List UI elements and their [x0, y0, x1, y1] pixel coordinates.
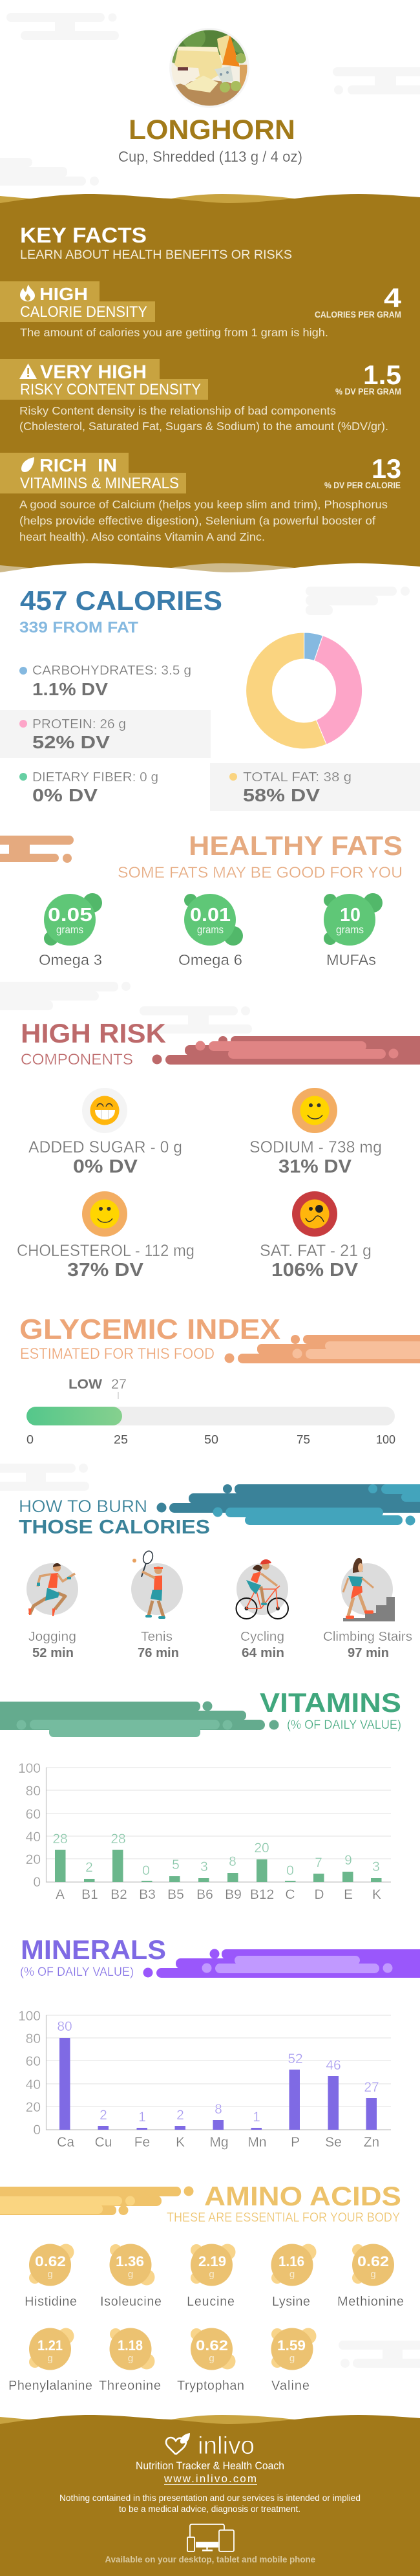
- legend: dietary fiber: DIETARY FIBER: 0 g: [32, 770, 158, 785]
- badge: omega 3: [39, 893, 102, 968]
- gauge label: [68, 1377, 127, 1399]
- badge: tryptophan: [177, 2328, 244, 2393]
- fact: risky content density: (Cholesterol, Saturated Fat, Sugars & Sodium) to the amount (%DV/gr).: [19, 420, 388, 433]
- gauge axis labels: 50: [204, 1433, 218, 1446]
- panel: calories: [0, 585, 420, 811]
- bar chart: vitamins: D: [314, 1887, 324, 1902]
- bar chart: minerals: 46: [326, 2058, 341, 2073]
- icon: warning triangle: [19, 363, 37, 379]
- disclaimer: [59, 2493, 361, 2514]
- bar chart: vitamins: 20: [26, 1852, 41, 1867]
- legend: dietary fiber: 0% DV: [32, 785, 98, 805]
- icon: stair climber: [341, 1558, 395, 1621]
- badge: threonine: g: [128, 2353, 133, 2364]
- badge: isoleucine: Isoleucine: [100, 2295, 162, 2309]
- badge: valine: 1.59: [277, 2337, 306, 2354]
- legend: total fat: [210, 763, 420, 811]
- subheading: (% OF DAILY VALUE): [287, 1718, 401, 1732]
- badge: methionine: 0.62: [357, 2253, 389, 2269]
- badge: omega 3: grams: [56, 924, 83, 936]
- item: saturated fat: SAT. FAT - 21 g: [260, 1242, 372, 1260]
- badge: valine: Valine: [271, 2379, 310, 2393]
- bar chart: vitamins: K: [372, 1887, 381, 1902]
- badge: lysine: [271, 2244, 317, 2309]
- badge: threonine: [99, 2328, 161, 2393]
- badge: mufas: grams: [336, 924, 364, 936]
- bar chart: vitamins: 28: [52, 1832, 68, 1846]
- badge: mufas: MUFAs: [326, 951, 376, 968]
- subheading: ESTIMATED FOR THIS FOOD: [20, 1345, 215, 1363]
- bar chart: vitamins: B12: [250, 1887, 274, 1902]
- bar chart: minerals: Zn: [364, 2135, 379, 2150]
- panel: how to burn those calories: [19, 1484, 420, 1660]
- badge: lysine: 1.16: [278, 2253, 304, 2269]
- subheading: SOME FATS MAY BE GOOD FOR YOU: [118, 864, 403, 882]
- activity: tennis: [131, 1550, 183, 1660]
- tagline: Nutrition Tracker & Health Coach: [136, 2460, 284, 2472]
- badge: leucine: [187, 2244, 235, 2309]
- activity: jogging: [26, 1563, 78, 1660]
- item: cholesterol: 37% DV: [67, 1260, 144, 1281]
- gauge axis labels: 0: [26, 1433, 34, 1446]
- bar chart: minerals: K: [176, 2135, 185, 2150]
- bar chart: vitamins: B5: [167, 1887, 184, 1902]
- heading: calories: 457 CALORIES: [20, 585, 222, 616]
- badge: phenylalanine: [8, 2328, 92, 2393]
- legend: total fat: 58% DV: [243, 785, 320, 805]
- item: saturated fat: 106% DV: [271, 1260, 359, 1281]
- badge: tryptophan: g: [209, 2353, 215, 2364]
- activity: tennis: Tenis: [141, 1630, 173, 1644]
- icon: devices: [187, 2524, 234, 2551]
- gauge label: 27: [111, 1377, 127, 1392]
- badge: omega 6: Omega 6: [178, 951, 242, 968]
- subheading: LEARN ABOUT HEALTH BENEFITS OR RISKS: [20, 248, 292, 262]
- bar chart: vitamins: 8: [229, 1854, 236, 1869]
- item: sodium: SODIUM - 738 mg: [249, 1138, 382, 1156]
- fact: calorie density: CALORIE DENSITY: [20, 303, 147, 321]
- activity: jogging: 52 min: [32, 1646, 74, 1660]
- badge: isoleucine: [100, 2244, 162, 2309]
- badge: threonine: 1.18: [118, 2337, 143, 2354]
- icon: cyclist: [236, 1559, 288, 1619]
- bar chart: vitamins: 100: [18, 1761, 41, 1776]
- item: cholesterol: CHOLESTEROL - 112 mg: [17, 1242, 194, 1260]
- heading: vitamins: VITAMINS: [260, 1687, 401, 1718]
- bar chart: vitamins: 9: [344, 1853, 352, 1868]
- fact: risky content density: [0, 359, 401, 433]
- bar chart: minerals: P: [291, 2135, 300, 2150]
- panel: glycemic index: [19, 1314, 420, 1446]
- heading: amino acids: AMINO ACIDS: [204, 2181, 401, 2211]
- legend: carbohydrates: [19, 664, 191, 699]
- bar chart: vitamins: [18, 1761, 391, 1902]
- badge: histidine: [25, 2244, 77, 2309]
- heading bold: THOSE CALORIES: [19, 1515, 210, 1538]
- bar chart: minerals: 0: [33, 2123, 41, 2138]
- badge: histidine: Histidine: [25, 2295, 77, 2309]
- bar chart: vitamins: A: [56, 1887, 65, 1902]
- fact: risky content density: Risky Content density is the relationship of bad components: [19, 404, 336, 417]
- heading: healthy fats: HEALTHY FATS: [189, 830, 403, 861]
- fact: rich in vitamins and minerals: VITAMINS & MINERALS: [20, 475, 179, 492]
- badge: phenylalanine: 1.21: [37, 2337, 63, 2354]
- legend: carbohydrates: CARBOHYDRATES: 3.5 g: [32, 664, 191, 678]
- food photo: cheese board: [169, 28, 249, 108]
- panel: healthy fats: [0, 830, 403, 968]
- fact: calorie density: CALORIES PER GRAM: [315, 309, 401, 319]
- bar chart: minerals: Cu: [95, 2135, 112, 2150]
- decoration: purple bars: [143, 1949, 420, 1978]
- badge: methionine: Methionine: [337, 2295, 404, 2309]
- bar chart: vitamins: B3: [139, 1887, 156, 1902]
- activity: climbing stairs: [323, 1558, 412, 1660]
- icon: frowning face: [292, 1191, 337, 1237]
- badge: leucine: g: [209, 2269, 215, 2280]
- bar chart: vitamins: E: [344, 1887, 353, 1902]
- bar chart: minerals: 8: [215, 2102, 222, 2117]
- activity: jogging: Jogging: [28, 1630, 76, 1644]
- item: added sugar: 0% DV: [73, 1156, 138, 1177]
- item: added sugar: [28, 1088, 182, 1177]
- fact: rich in vitamins and minerals: (helps provide effective digestion), Selenium (a powerful booster of: [19, 514, 375, 527]
- badge: valine: g: [289, 2353, 295, 2364]
- bar chart: minerals: 1: [253, 2110, 260, 2125]
- fact: rich in vitamins and minerals: % DV PER CALORIE: [324, 480, 401, 490]
- item: added sugar: ADDED SUGAR - 0 g: [28, 1138, 182, 1156]
- donut chart: macronutrients: [246, 633, 362, 749]
- badge: leucine: Leucine: [187, 2295, 235, 2309]
- panel: minerals: [18, 1934, 420, 2150]
- fact: risky content density: VERY HIGH: [40, 362, 147, 383]
- bar chart: vitamins: 7: [315, 1856, 322, 1870]
- badge: histidine: 0.62: [35, 2253, 66, 2269]
- footer: [0, 2415, 420, 2576]
- fact: rich in vitamins and minerals: RICH IN: [39, 455, 117, 475]
- icon: smiling face: [82, 1191, 127, 1237]
- fact: rich in vitamins and minerals: 13: [372, 453, 401, 484]
- activity: climbing stairs: 97 min: [348, 1646, 389, 1660]
- title: LONGHORN: [129, 114, 295, 146]
- badge: omega 3: Omega 3: [39, 951, 102, 968]
- bar chart: minerals: 20: [26, 2100, 41, 2115]
- gauge axis labels: [26, 1433, 395, 1446]
- panel: amino acids: [0, 2181, 404, 2393]
- logo: wordmark: inlivo: [198, 2432, 255, 2460]
- decoration: blue bars: [156, 1484, 420, 1525]
- activity: tennis: 76 min: [138, 1646, 179, 1660]
- fact: rich in vitamins and minerals: heart health). Also contains Vitamin A and Zinc.: [19, 530, 265, 543]
- badge: phenylalanine: g: [47, 2353, 53, 2364]
- fact: risky content density: RISKY CONTENT DENSITY: [20, 381, 201, 398]
- fact: rich in vitamins and minerals: [0, 453, 401, 543]
- badge: mufas: 10: [340, 905, 361, 925]
- bar chart: vitamins: 40: [26, 1830, 41, 1845]
- badge: methionine: [337, 2244, 404, 2309]
- fact: risky content density: 1.5: [363, 360, 401, 390]
- decoration: yellow bars: [0, 2186, 194, 2215]
- badge: isoleucine: 1.36: [116, 2253, 144, 2269]
- subheading: (% OF DAILY VALUE): [20, 1965, 134, 1979]
- bar chart: vitamins: B1: [81, 1887, 98, 1902]
- subheading: components: COMPONENTS: [21, 1051, 133, 1068]
- fact: calorie density: 4: [384, 283, 402, 313]
- legend: protein: PROTEIN: 26 g: [32, 717, 126, 731]
- badge: mufas: [324, 893, 383, 968]
- disclaimer: to be a medical advice, diagnosis or treatment.: [119, 2504, 300, 2514]
- bar chart: minerals: 80: [57, 2019, 72, 2034]
- badge: tryptophan: Tryptophan: [177, 2379, 244, 2393]
- website: www.inlivo.com: [163, 2473, 257, 2485]
- item: cholesterol: [17, 1191, 194, 1281]
- badge: lysine: g: [289, 2269, 295, 2280]
- legend: protein: [0, 710, 211, 758]
- bar chart: minerals: 2: [176, 2108, 184, 2123]
- badge: omega 6: 0.01: [190, 905, 231, 925]
- legend: protein: 52% DV: [32, 732, 110, 752]
- badge: omega 6: grams: [197, 924, 224, 936]
- decoration: peach bars: [0, 836, 74, 863]
- panel: key facts: [0, 194, 420, 582]
- icon: grinning face: [82, 1088, 127, 1133]
- item: sodium: [249, 1088, 382, 1177]
- fact: calorie density: HIGH: [39, 284, 88, 304]
- gauge label: LOW: [68, 1377, 102, 1392]
- bar chart: vitamins: 0: [286, 1863, 294, 1878]
- bar chart: minerals: 60: [26, 2054, 41, 2069]
- badge: methionine: g: [370, 2269, 376, 2280]
- decoration: orange bars: [225, 1335, 420, 1363]
- bar chart: minerals: 100: [18, 2009, 41, 2024]
- disclaimer: Nothing contained in this presentation and our services is intended or implied: [59, 2493, 361, 2503]
- bar chart: vitamins: B6: [196, 1887, 213, 1902]
- decoration: red bars: [152, 1036, 420, 1065]
- bar chart: vitamins: 80: [26, 1784, 41, 1799]
- decoration: green bars: [0, 1701, 279, 1737]
- heading: HOW TO BURN: [19, 1497, 147, 1516]
- badge: phenylalanine: Phenylalanine: [8, 2379, 92, 2393]
- bar chart: minerals: Se: [325, 2135, 342, 2150]
- icon: smiling face: [292, 1088, 337, 1133]
- bar chart: vitamins: 28: [110, 1832, 126, 1846]
- badge: leucine: 2.19: [198, 2253, 226, 2269]
- item: saturated fat: [260, 1191, 372, 1281]
- subheading: THESE ARE ESSENTIAL FOR YOUR BODY: [167, 2211, 400, 2225]
- bar chart: minerals: 2: [100, 2108, 107, 2123]
- heading: key facts: KEY FACTS: [20, 223, 147, 247]
- fact: rich in vitamins and minerals: A good source of Calcium (helps you keep slim and trim), Phosphorus: [19, 498, 388, 511]
- bar chart: minerals: 40: [26, 2077, 41, 2092]
- bar chart: minerals: 52: [288, 2051, 303, 2066]
- badge: lysine: Lysine: [272, 2295, 310, 2309]
- bar chart: vitamins: C: [285, 1887, 295, 1902]
- bar chart: minerals: Fe: [134, 2135, 150, 2150]
- icon: leaf: [21, 457, 34, 472]
- panel: high risk components: [17, 1018, 420, 1281]
- bar chart: vitamins: B2: [110, 1887, 127, 1902]
- badge: omega 6: [178, 894, 243, 968]
- bar chart: minerals: 27: [364, 2080, 379, 2095]
- badge: histidine: g: [47, 2269, 53, 2280]
- bar chart: vitamins: 3: [200, 1859, 208, 1874]
- bar chart: minerals: Mg: [209, 2135, 229, 2150]
- bar chart: vitamins: B9: [225, 1887, 242, 1902]
- bar chart: minerals: 80: [26, 2031, 41, 2046]
- panel: vitamins: [0, 1687, 401, 1902]
- legend: total fat: TOTAL FAT: 38 g: [243, 770, 352, 785]
- serving size: Cup, Shredded (113 g / 4 oz): [118, 148, 302, 165]
- activity: climbing stairs: Climbing Stairs: [323, 1630, 412, 1644]
- bar chart: minerals: [18, 2009, 391, 2150]
- bar chart: minerals: Mn: [247, 2135, 267, 2150]
- activity: cycling: 64 min: [242, 1646, 284, 1660]
- item: sodium: 31% DV: [278, 1156, 352, 1177]
- activity: cycling: [236, 1559, 288, 1660]
- bar chart: vitamins: 2: [85, 1860, 93, 1875]
- bar chart: minerals: 1: [138, 2110, 146, 2125]
- bar chart: minerals: Ca: [57, 2135, 74, 2150]
- badge: omega 3: 0.05: [48, 905, 92, 925]
- gauge axis labels: 75: [297, 1433, 310, 1446]
- bar chart: vitamins: 60: [26, 1807, 41, 1822]
- availability note: Available on your desktop, tablet and mobile phone: [105, 2554, 315, 2564]
- gauge axis labels: 25: [114, 1433, 128, 1446]
- badge: valine: [271, 2328, 317, 2393]
- badge: threonine: Threonine: [99, 2379, 161, 2393]
- subheading: from fat: 339 FROM FAT: [19, 619, 138, 636]
- logo: inlivo heart: [166, 2433, 190, 2454]
- icon: jogger: [26, 1563, 78, 1616]
- bar chart: vitamins: 3: [372, 1859, 380, 1874]
- heading: minerals: MINERALS: [21, 1934, 166, 1965]
- heading: glycemic index: GLYCEMIC INDEX: [19, 1314, 280, 1345]
- fact: risky content density: % DV PER GRAM: [335, 386, 401, 396]
- badge: isoleucine: g: [128, 2269, 133, 2280]
- fact: calorie density: The amount of calories you are getting from 1 gram is high.: [20, 326, 328, 339]
- bar chart: vitamins: 0: [33, 1875, 41, 1890]
- heading: high risk: HIGH RISK: [21, 1018, 166, 1048]
- fact: calorie density: [0, 281, 402, 339]
- icon: tennis player: [131, 1550, 183, 1619]
- gauge bar: [26, 1407, 395, 1425]
- badge: tryptophan: 0.62: [196, 2337, 228, 2354]
- gauge axis labels: 100: [376, 1433, 395, 1446]
- bar chart: vitamins: 20: [254, 1841, 269, 1856]
- legend: carbohydrates: 1.1% DV: [32, 679, 108, 699]
- bar chart: vitamins: 5: [172, 1857, 180, 1872]
- legend: dietary fiber: [19, 770, 158, 805]
- bar chart: vitamins: 0: [142, 1863, 150, 1878]
- icon: flame: [20, 285, 35, 301]
- activity: cycling: Cycling: [240, 1630, 284, 1644]
